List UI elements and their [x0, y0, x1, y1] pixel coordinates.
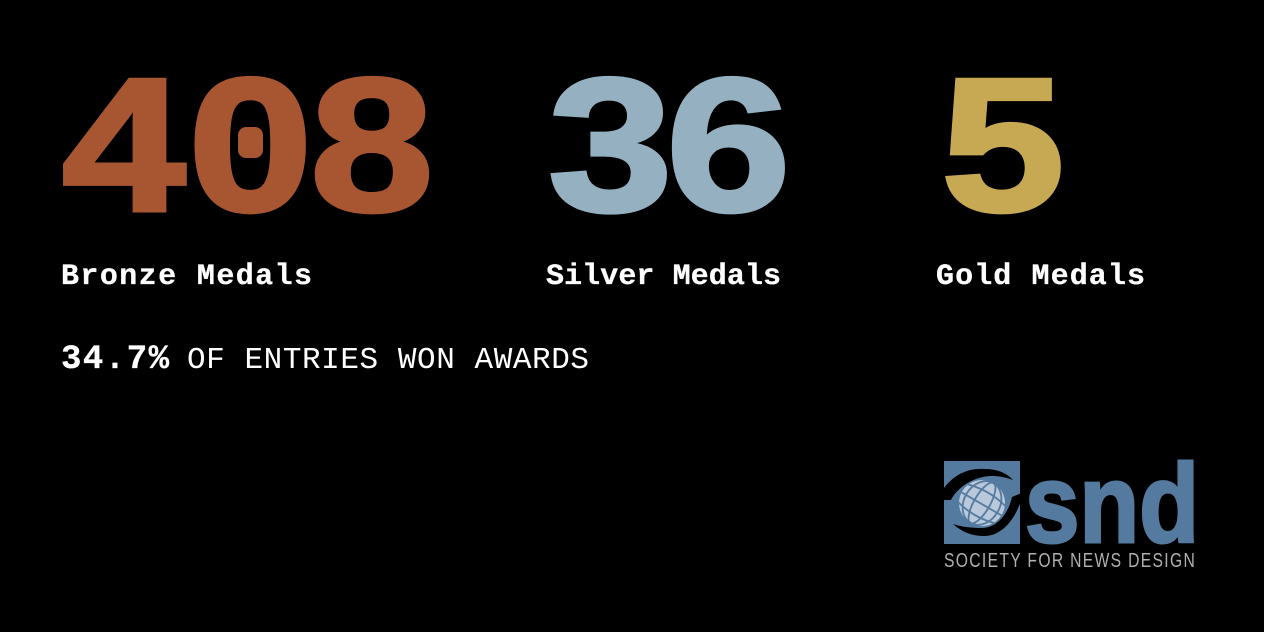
logo eye upper swoosh [944, 469, 1013, 500]
label: gold medals: Gold Medals [936, 260, 1145, 294]
logo globe [951, 472, 1013, 534]
stat: silver count 36 [548, 40, 791, 252]
stat: bronze count 408 [62, 39, 434, 252]
label: silver medals: Silver Medals [546, 260, 781, 294]
logo square [944, 461, 1020, 544]
logo: society for news design [944, 442, 1199, 571]
stat: bronze count 408: 4 [62, 39, 186, 251]
logo tagline: SOCIETY FOR NEWS DESIGN [944, 549, 1196, 571]
stat: silver count 36: 6 [666, 40, 791, 252]
logo eye lower swoosh [953, 492, 1024, 536]
stat: bronze count 408: 8 [310, 39, 434, 251]
stat: silver count 36: 3 [548, 40, 673, 252]
stat: gold count 5: 5 [941, 39, 1065, 251]
logo wordmark snd: snd [1025, 442, 1199, 566]
text: entries won awards: OF ENTRIES WON AWARDS [187, 343, 589, 378]
stat: bronze count 408: 0 [188, 40, 313, 252]
text: entries won awards: 34.7% [61, 341, 170, 379]
label: bronze medals: Bronze Medals [61, 260, 312, 294]
